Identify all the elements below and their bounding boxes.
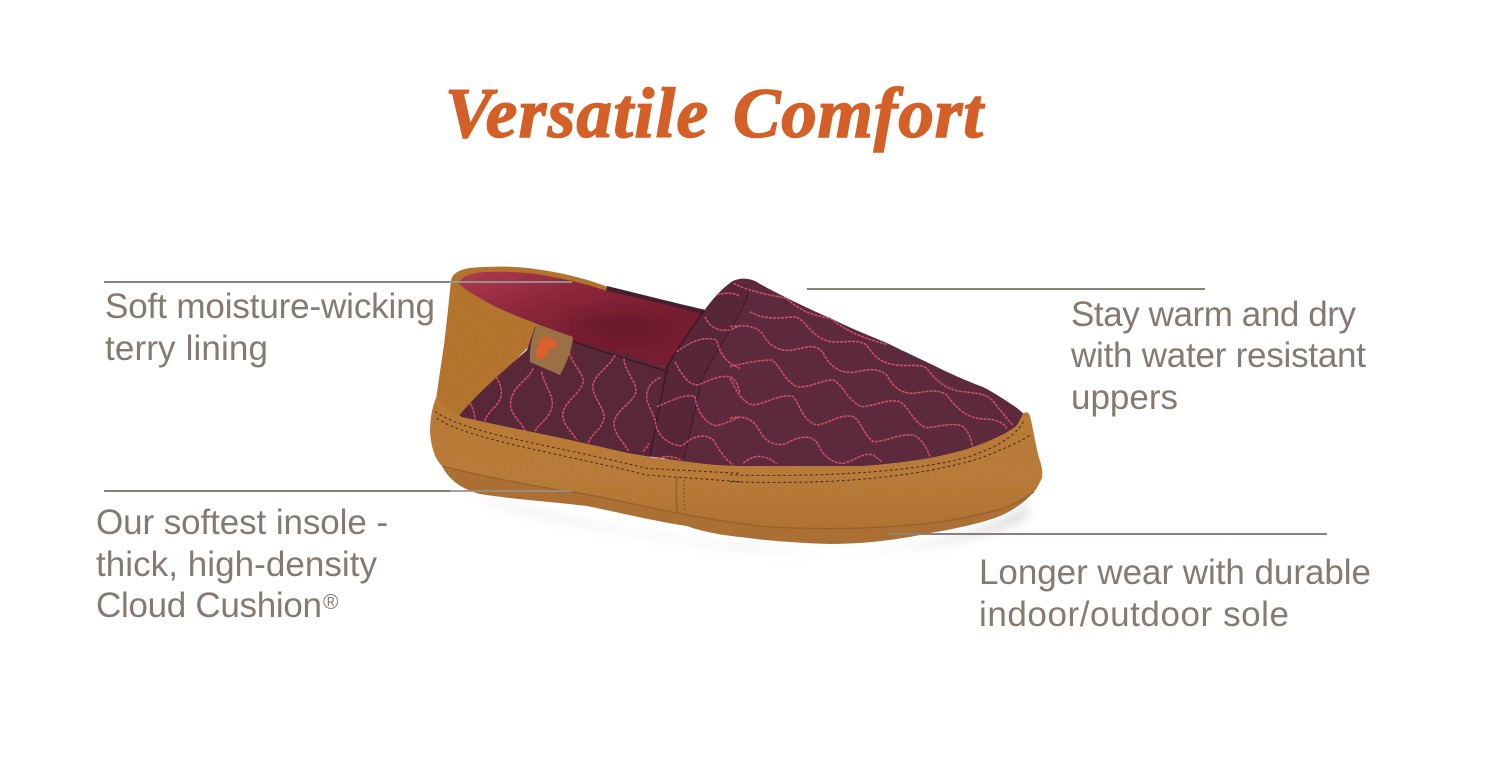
callout line: lining: [104, 281, 450, 283]
callout line: insole: [104, 490, 450, 492]
rand and sole seam: [442, 466, 1034, 529]
rand seam: [675, 477, 678, 513]
callout: lining: Soft moisture-wicking: [105, 287, 435, 326]
product illustration: slipper: [430, 267, 1042, 552]
callout line: uppers: [807, 288, 1205, 290]
callout line: sole: [888, 533, 1327, 535]
icon: acorn: [533, 334, 559, 362]
title: Comfort: [733, 75, 985, 153]
brand tab with acorn: [530, 324, 573, 375]
callout: insole: ®: [323, 591, 339, 614]
callout: lining: [105, 287, 435, 368]
suede rand: [430, 398, 1042, 529]
terry lining: [459, 272, 705, 368]
callout: sole: Longer wear with durable: [979, 553, 1371, 592]
callout: insole: Our softest insole -: [96, 503, 388, 542]
callout: uppers: with water resistant: [1070, 336, 1366, 375]
inner vamp edge behind opening: [606, 286, 706, 314]
callout: insole: thick, high-density: [96, 545, 378, 584]
callout: sole: indoor/outdoor sole: [979, 595, 1289, 634]
callout: insole: Cloud Cushion: [96, 586, 322, 625]
vamp folded band: [646, 281, 748, 459]
vamp: quilted front: [646, 279, 1024, 467]
quarter: quilted back panel: [458, 327, 667, 457]
quilted stitching, rear: [470, 293, 740, 464]
rand dotted stitching: [435, 412, 740, 482]
lining shadow fold: [569, 315, 661, 335]
callout: uppers: Stay warm and dry: [1071, 295, 1356, 334]
callout: uppers: uppers: [1071, 378, 1178, 417]
ground shadow: [470, 495, 1030, 552]
callout: lining: terry lining: [105, 329, 268, 368]
seam shadow: [573, 311, 704, 456]
callout: insole: [96, 503, 388, 625]
heel counter suede: [436, 267, 610, 420]
callout: sole: [979, 553, 1371, 634]
outsole: [442, 452, 1037, 544]
title: [445, 75, 985, 153]
band seam: [684, 285, 748, 459]
title: Versatile: [445, 75, 708, 153]
callout: uppers: [1070, 295, 1366, 417]
quilted stitching, front: [730, 283, 1013, 464]
